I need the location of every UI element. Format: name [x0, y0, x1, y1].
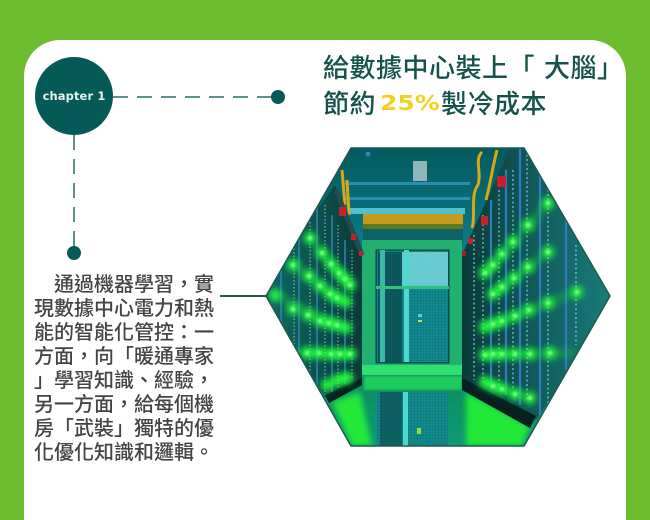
body text: 化優化知識和邏輯。 — [34, 436, 214, 465]
connectors right — [462, 176, 506, 256]
rack wall glow bands — [275, 203, 577, 398]
door mesh — [377, 251, 448, 362]
floor — [318, 375, 551, 446]
ceiling — [312, 148, 510, 251]
hexagon outline — [266, 148, 610, 446]
body text: 方面，向「暖通專家 — [34, 340, 214, 369]
body text: 通過機器學習，實 — [54, 268, 214, 297]
body text: 能的智能化管控：一 — [34, 316, 214, 345]
LED glow right — [479, 197, 583, 404]
hexagon photo: data center aisle — [266, 147, 611, 447]
cables right — [472, 150, 497, 228]
connectors left — [339, 207, 363, 256]
left rack — [267, 185, 362, 397]
yellow beam — [363, 214, 463, 224]
title line 2: 25% — [380, 91, 440, 115]
body text: 現數據中心電力和熱 — [34, 292, 214, 321]
chapter badge — [35, 57, 113, 135]
body text: 」學習知識、經驗， — [34, 364, 214, 393]
door frame — [362, 240, 462, 376]
chapter badge: chapter 1 — [43, 89, 105, 103]
body text: 另一方面，給每個機 — [34, 388, 214, 417]
LED glow left — [269, 232, 356, 391]
body text — [34, 268, 214, 465]
title line 1: 給數據中心裝上「 大腦」 — [323, 48, 624, 85]
title line 2: 節約 製冷成本 — [323, 84, 547, 121]
right rack — [462, 148, 620, 420]
body text: 房「武裝」獨特的優 — [34, 412, 214, 441]
LED cores — [291, 201, 579, 400]
cables left — [336, 170, 362, 255]
